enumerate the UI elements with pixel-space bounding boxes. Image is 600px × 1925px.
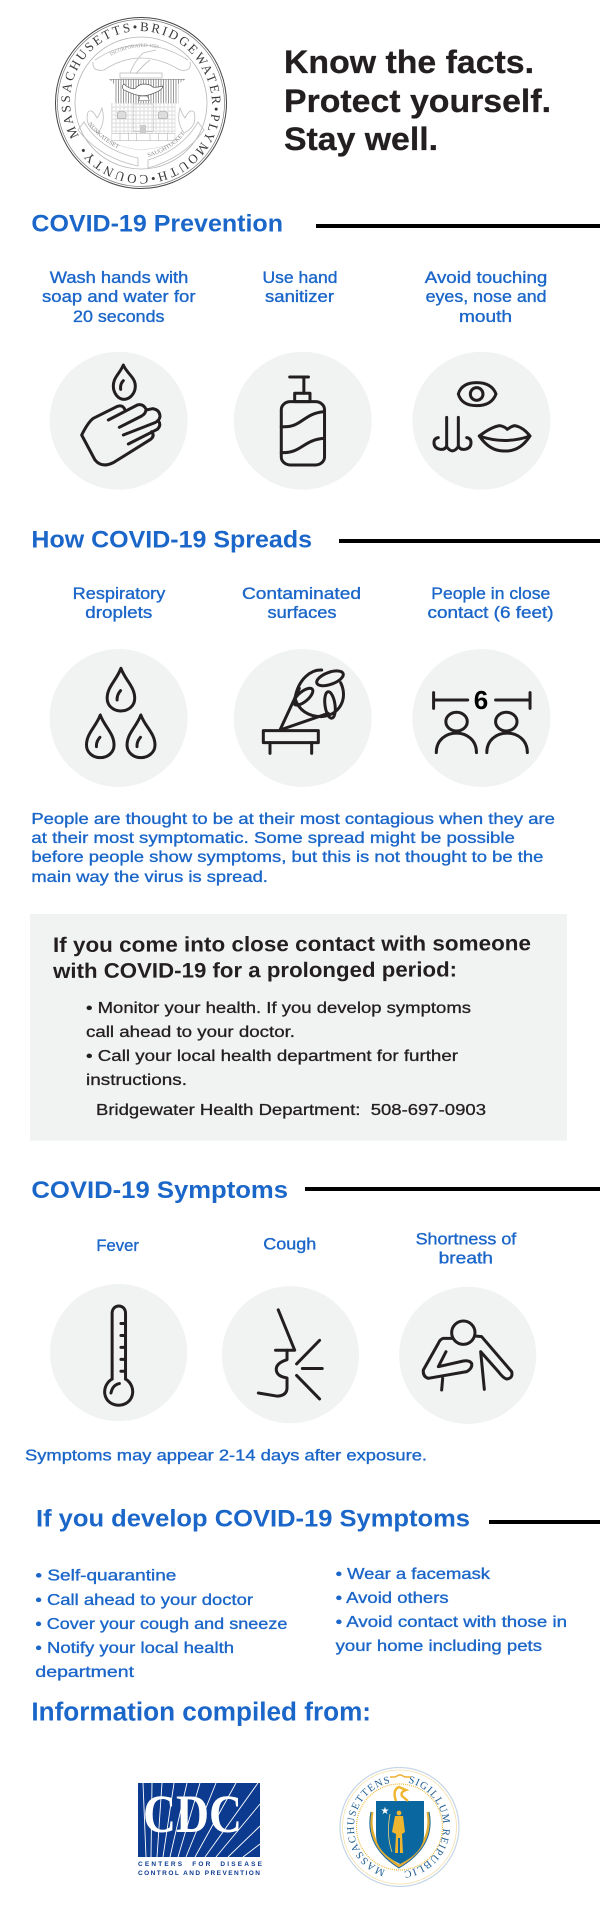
- label: respiratory droplets: droplets: [85, 604, 152, 622]
- text: symptom onset: Symptoms may appear 2-14 days after exposure.: [25, 1448, 427, 1465]
- logo: Massachusetts state seal: ★: [381, 1806, 390, 1817]
- list: left column actions: department: [35, 1664, 135, 1681]
- panel body text: call ahead to your doctor.: [86, 1024, 295, 1041]
- list: left column actions: • Self-quarantine: [35, 1568, 177, 1585]
- list: right column actions: [336, 1566, 567, 1655]
- logo: Massachusetts state seal: MASSACHUSETTENSIS.: [347, 1776, 390, 1876]
- label: hand sanitizer: Use hand: [262, 269, 338, 287]
- label: fever: Fever: [96, 1237, 139, 1255]
- panel: close contact advice: [30, 914, 567, 1141]
- town seal: Bridgewater: INCORPORATED 1656: [110, 44, 159, 56]
- icon: people six feet apart: [412, 649, 550, 787]
- label: avoid touching: Avoid touching: [425, 269, 547, 287]
- paragraph: contagiousness: [31, 811, 555, 886]
- logo: CDC: CONTROL AND PREVENTION: [138, 1870, 260, 1877]
- list: right column actions: • Avoid others: [336, 1590, 449, 1607]
- list: left column actions: [35, 1568, 288, 1681]
- list: right column actions: • Wear a facemask: [336, 1566, 491, 1583]
- panel heading: with COVID-19 for a prolonged period:: [52, 958, 457, 983]
- list: left column actions: • Cover your cough and sneeze: [35, 1616, 288, 1633]
- icon: shortness of breath: [399, 1287, 536, 1424]
- label: respiratory droplets: [73, 585, 166, 622]
- label: contaminated surfaces: surfaces: [268, 604, 336, 622]
- list: right column actions: • Avoid contact with those in: [336, 1614, 567, 1631]
- icon: people six feet apart: 6: [474, 685, 488, 715]
- paragraph: contagiousness: main way the virus is spread.: [31, 869, 268, 886]
- heading: COVID-19 Prevention: COVID-19 Prevention: [31, 211, 283, 238]
- label: close contact: [428, 585, 554, 622]
- icon: eye, nose, mouth: [412, 352, 550, 490]
- icon: droplets: [50, 649, 188, 787]
- panel heading: [52, 932, 531, 983]
- panel body text: [86, 1000, 471, 1089]
- logo: CDC: CENTERS FOR DISEASE: [138, 1861, 263, 1868]
- icon: cough: [222, 1286, 359, 1423]
- title: Stay well.: [284, 121, 438, 157]
- panel body text: • Call your local health department for further: [86, 1048, 459, 1065]
- label: avoid touching: mouth: [459, 308, 512, 326]
- label: wash hands: 20 seconds: [73, 308, 164, 326]
- label: shortness of breath: [416, 1230, 517, 1268]
- label: shortness of breath: breath: [439, 1250, 493, 1268]
- list: right column actions: your home including pets: [336, 1638, 542, 1655]
- label: respiratory droplets: Respiratory: [73, 585, 166, 603]
- label: avoid touching: eyes, nose and: [426, 288, 547, 306]
- paragraph: contagiousness: before people show symptoms, but this is not thought to be the: [31, 849, 544, 866]
- logo: CDC: CDC: [143, 1784, 242, 1844]
- icon: sanitizer pump bottle: [234, 352, 372, 490]
- logo: CDC: [138, 1783, 263, 1877]
- heading: COVID-19 Symptoms: COVID-19 Symptoms: [31, 1177, 288, 1204]
- icon: hand washing: [50, 352, 188, 490]
- label: close contact: contact (6 feet): [428, 604, 554, 622]
- heading: information sources: Information compiled from:: [31, 1699, 371, 1727]
- label: close contact: People in close: [431, 585, 550, 603]
- label: hand sanitizer: [262, 269, 338, 306]
- label: wash hands: soap and water for: [42, 288, 196, 306]
- health department phone: Bridgewater Health Department: 508-697-0903: [96, 1102, 486, 1119]
- label: hand sanitizer: sanitizer: [265, 288, 335, 306]
- list: left column actions: • Notify your local health: [35, 1640, 234, 1657]
- label: wash hands: [42, 269, 196, 326]
- label: cough: Cough: [263, 1236, 316, 1254]
- panel heading: If you come into close contact with someone: [53, 932, 531, 957]
- logo: Massachusetts state seal: SIGILLUM REIPUBLICÆ: [404, 1776, 450, 1878]
- panel body text: instructions.: [86, 1072, 187, 1089]
- town seal: Bridgewater: MASSACHUSETTS•BRIDGEWATER•PLYMOUTH•COUNTY•: [61, 22, 220, 184]
- label: contaminated surfaces: Contaminated: [242, 585, 361, 603]
- logo: Massachusetts state seal: [339, 1766, 460, 1888]
- title: [284, 44, 551, 157]
- label: shortness of breath: Shortness of: [416, 1230, 517, 1248]
- label: avoid touching: [425, 269, 547, 326]
- town seal: Bridgewater: NUNKATESET: [88, 122, 120, 148]
- paragraph: contagiousness: at their most symptomatic. Some spread might be possible: [31, 830, 515, 847]
- heading: How COVID-19 Spreads: How COVID-19 Spreads: [31, 527, 312, 554]
- panel body text: • Monitor your health. If you develop symptoms: [86, 1000, 471, 1017]
- town seal: Bridgewater: SAUGHTUCKET: [148, 131, 184, 157]
- list: left column actions: • Call ahead to your doctor: [35, 1592, 254, 1609]
- label: wash hands: Wash hands with: [50, 269, 188, 287]
- label: contaminated surfaces: [242, 585, 361, 622]
- heading: if you develop symptoms: If you develop COVID-19 Symptoms: [36, 1506, 470, 1533]
- title: Know the facts.: [284, 44, 534, 80]
- icon: contaminated surface: [234, 649, 372, 787]
- paragraph: contagiousness: People are thought to be at their most contagious when they are: [31, 811, 555, 828]
- title: Protect yourself.: [284, 83, 551, 119]
- icon: thermometer: [50, 1284, 187, 1421]
